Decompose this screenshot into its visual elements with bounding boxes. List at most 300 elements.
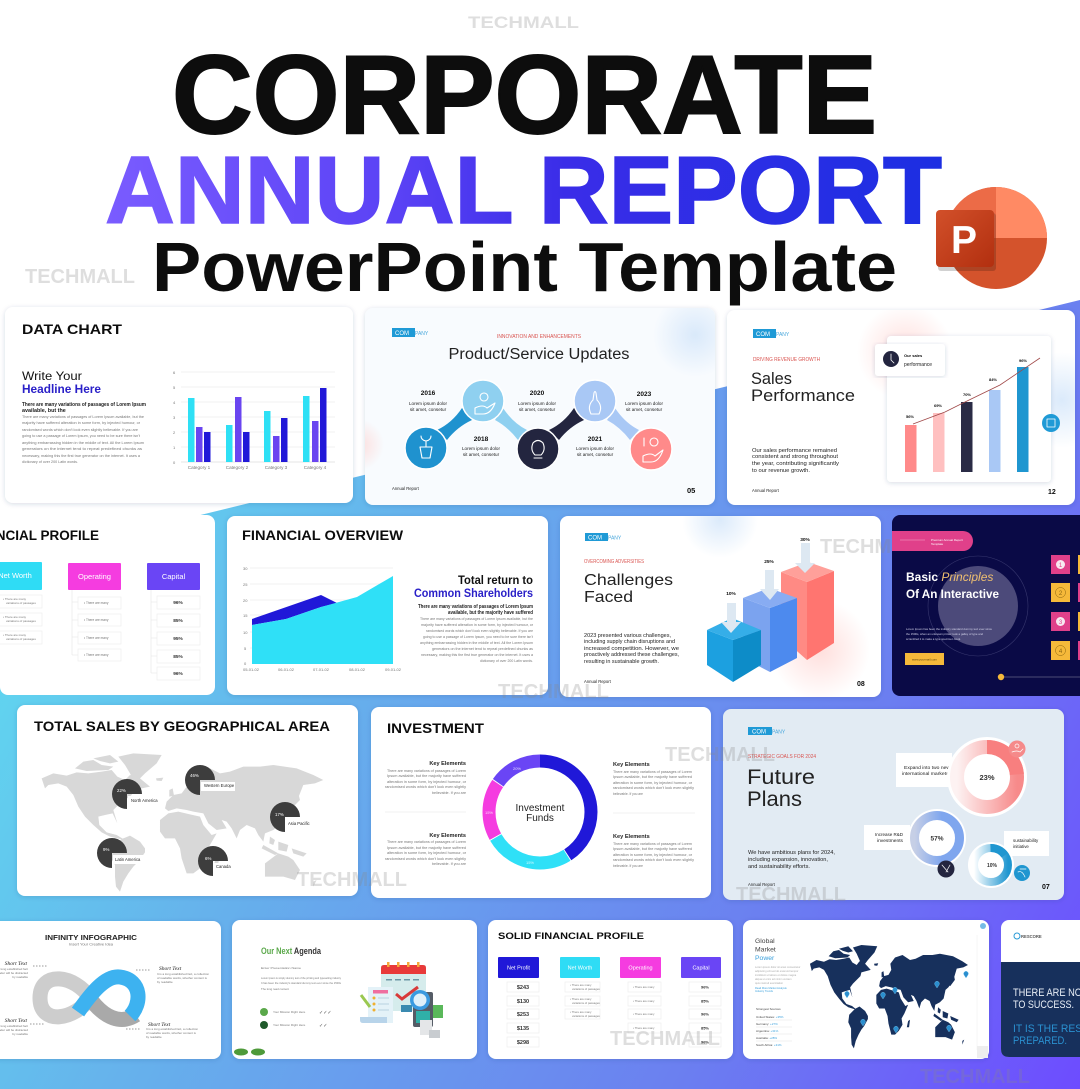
agenda items: ✓✓✓ — [319, 1010, 332, 1016]
text block: future summary: and sustainability efforts. — [748, 864, 810, 870]
heading: basic principles: Of An Interactive — [906, 587, 999, 601]
bar values: 70% — [963, 392, 971, 397]
area chart: 07-01-02 — [313, 667, 330, 672]
logo: company: COM — [756, 332, 770, 338]
timeline labels: sit amet, consetur — [463, 452, 500, 457]
text block: sales summary: to our revenue growth. — [752, 468, 810, 474]
map pins — [845, 971, 968, 1033]
text block: key elements left: There are many variations of passages of Lorem — [387, 839, 467, 844]
text block — [755, 965, 801, 993]
panel: investment — [371, 707, 711, 898]
donut: 23 percent: 23% — [979, 773, 995, 782]
footer: Annual Report — [584, 679, 612, 684]
text block: key elements right — [613, 762, 695, 868]
operating rows — [628, 982, 661, 1033]
text block: key elements right: alteration in some form, by injected humour, or — [613, 780, 693, 785]
labels: short text: Short Text — [148, 1022, 171, 1028]
operating rows: • There are many — [84, 618, 109, 622]
text block: total return: There are many variations of passages of Lorem Ipsum available, but the — [420, 616, 534, 621]
footer — [584, 679, 865, 688]
footer: 05 — [687, 486, 695, 495]
net profit rows: $298 — [517, 1040, 529, 1046]
text block: the 1500s, when an unknown printer took a galley of type and — [906, 632, 983, 636]
text block: key elements right: There are many variations of passages of Lorem — [613, 769, 693, 774]
icon: powerpoint logo — [936, 187, 1047, 289]
area chart: 05-01-02 — [243, 667, 260, 672]
text block: total return: going to use a passage of Lorem Ipsum, you need to be sure there isn't — [423, 634, 534, 639]
text block: total return: majority have suffered alteration in some form, by injected humour, or — [421, 622, 534, 627]
net worth rows — [0, 595, 42, 644]
bar values: 56% — [906, 414, 914, 419]
text block: challenges summary: resulting in sustainable growth. — [584, 659, 659, 665]
icon: powerpoint logo: P — [951, 219, 977, 262]
panel: rescore slide (cropped) — [1001, 920, 1080, 1057]
labels: short text: It is a long established fact, a collection — [157, 972, 209, 976]
text block — [906, 627, 992, 641]
3d bar chart: 30% — [800, 537, 811, 543]
text block — [261, 966, 341, 991]
pill header: Template — [931, 542, 944, 546]
text block: total return: Common Shareholders — [414, 588, 533, 600]
footer: 08 — [857, 681, 865, 688]
panel: global market power — [743, 920, 989, 1059]
donut: 23 percent — [947, 737, 1027, 817]
logo: company: PANY — [772, 730, 786, 736]
bar chart: categories: 3 — [173, 415, 176, 420]
timeline labels — [409, 390, 663, 457]
bar chart: categories: Category 3 — [265, 465, 288, 470]
capital rows: 96% — [173, 600, 184, 606]
column headers: Capital — [692, 966, 710, 972]
logo: rescore: RESCORE — [1021, 934, 1042, 939]
panel: financial profile (cropped) — [0, 515, 215, 695]
logo: company: PANY — [608, 536, 622, 542]
list: countries: Argentina: +31% — [756, 1029, 779, 1033]
net worth rows: variations of passages — [572, 987, 600, 991]
heading: Our Next Agenda — [261, 946, 322, 956]
card: our sales performance: Our sales — [904, 353, 923, 358]
pie labels: Western Europe — [204, 783, 235, 788]
heading: future plans — [747, 754, 816, 811]
bars — [905, 367, 1028, 472]
text block: Read More Market Analysis — [755, 986, 787, 990]
area chart: 0 — [244, 661, 247, 666]
capital rows: 85% — [701, 1026, 709, 1030]
panel: data chart — [5, 307, 353, 503]
text block: challenges summary — [584, 633, 679, 665]
capital rows — [151, 590, 200, 680]
pie labels: 46% — [190, 773, 199, 778]
labels: short text: by readable — [12, 975, 28, 979]
timeline labels: sit amet, consetur — [577, 452, 614, 457]
world map dark — [810, 945, 968, 1048]
text block: Lorem Ipsum has been the industry standard dummy text ever since — [906, 627, 992, 631]
timeline connectors — [437, 408, 639, 440]
text block: challenges summary: including supply chain disruptions and — [584, 639, 675, 645]
logo: company: COM — [588, 536, 602, 542]
logo: company: COM — [752, 730, 766, 736]
labels: short text: of readable words, whether content is — [146, 1031, 196, 1035]
heading: product service updates: INNOVATION AND ENHANCEMENTS — [497, 334, 581, 340]
heading: future plans: Plans — [747, 788, 802, 811]
numbered squares: 1 — [1059, 563, 1063, 569]
text block: total return — [414, 575, 534, 663]
column headers — [498, 957, 721, 978]
logo: company: PANY — [776, 332, 790, 338]
panel: solid financial profile — [488, 920, 733, 1059]
text block: key elements left: There are many variations of passages of Lorem — [387, 768, 467, 773]
timeline labels: 2018 — [474, 436, 489, 443]
text block: total return: Total return to — [458, 575, 533, 587]
agenda items: Your Mission Right Here — [273, 1010, 306, 1014]
text block: key elements left: Ipsum available, but the majority have suffered — [387, 773, 466, 778]
capital rows: 96% — [701, 1012, 709, 1016]
label box: markets: Expand into two new — [904, 765, 951, 770]
net worth rows: variations of passages — [6, 619, 36, 623]
net profit rows: $243 — [517, 985, 529, 991]
text block: key elements left — [385, 761, 467, 866]
net worth rows: • There are many — [570, 1010, 592, 1014]
bar values: 84% — [989, 377, 997, 382]
footer: Annual Report — [392, 486, 420, 491]
timeline labels: sit amet, consetur — [626, 407, 663, 412]
timeline labels: sit amet, consetur — [519, 407, 556, 412]
panel: challenges faced — [559, 516, 882, 699]
card: our sales performance: performance — [904, 362, 932, 368]
donut: 10 percent — [968, 842, 1030, 888]
text block: total return: generators on the internet tend to repeat predefined chunks as — [432, 646, 533, 651]
text block: aliqua ut enim ad minim veniam — [755, 977, 791, 981]
heading: TOTAL SALES BY GEOGRAPHICAL AREA — [34, 719, 330, 734]
gradient background — [0, 300, 1080, 1089]
bar chart: categories: Category 2 — [226, 465, 249, 470]
logo: company — [392, 328, 429, 337]
pie labels: Latin America — [115, 857, 141, 862]
title: powerpoint template: PowerPoint Template — [152, 228, 897, 306]
donut labels: 15% — [485, 810, 493, 815]
footer: 07 — [1042, 884, 1050, 891]
bar chart: categories: 6 — [173, 370, 176, 375]
capital rows: 85% — [173, 618, 184, 624]
text block: there are no — [1013, 987, 1080, 1047]
text block: write your headline: going to use a passage of Lorem Ipsum, you need to be sure there isn't — [22, 433, 141, 438]
operating rows: • There are many — [84, 601, 109, 605]
text block: The long read content — [261, 987, 289, 991]
donut labels: Funds — [526, 813, 554, 824]
list: countries — [756, 1007, 792, 1047]
text block: key elements left: randomised words which don't look even slightly — [385, 784, 466, 789]
timeline icons — [420, 392, 663, 462]
text block: key elements right: Key Elements — [613, 834, 650, 840]
label box: research — [864, 825, 910, 850]
chart card — [887, 336, 1051, 482]
text block: key elements right: believable. If you are — [613, 863, 644, 868]
labels: short text: of readable words, whether content is — [157, 976, 207, 980]
column headers: Capital — [162, 572, 186, 581]
text block: write your headline: available, but the — [22, 408, 66, 414]
pie labels: North America — [131, 798, 158, 803]
operating rows: • There are many — [84, 636, 109, 640]
operating rows: • There are many — [84, 653, 109, 657]
watermarks over slides: TECHMALL — [297, 869, 407, 891]
text block: incididunt ut labore et dolore magna — [755, 973, 797, 977]
text block: Industry Trends — [755, 989, 774, 993]
text block: future summary — [748, 850, 835, 870]
heading: product service updates: Product/Service Updates — [448, 346, 630, 363]
infinity diagram — [40, 977, 138, 1019]
heading: sales performance — [751, 357, 855, 405]
numbered squares: 2 — [1059, 591, 1063, 597]
donut labels: 40% — [573, 802, 581, 807]
column headers: Operating — [78, 572, 111, 581]
operating rows — [72, 590, 121, 661]
panel: total sales by geographical area — [17, 705, 358, 896]
bar chart: categories: 5 — [173, 385, 176, 390]
text block: total return: available, but the majority have suffered — [448, 610, 533, 616]
column headers: Net Profit — [507, 966, 530, 972]
operating rows: • There are many — [633, 999, 655, 1003]
labels: short text — [0, 961, 209, 1039]
labels: short text: by readable — [12, 1032, 28, 1036]
text block: key elements right: alteration in some form, by injected humour, or — [613, 852, 693, 857]
capital rows: 85% — [701, 998, 709, 1004]
panel: product service updates — [363, 307, 717, 507]
text block: total return: dictionary of over 200 Latin words. — [480, 658, 533, 663]
illustration: calendar and finance — [360, 962, 443, 1038]
logo: company: COM — [395, 331, 409, 337]
capital rows: 95% — [173, 636, 184, 642]
agenda items: ✓✓ — [319, 1023, 327, 1029]
panel: sales performance — [727, 304, 1080, 505]
text block: total return: necessary, making this the first true generator on the internet. It uses a — [421, 652, 534, 657]
watermarks over slides — [297, 744, 1030, 1088]
footer — [748, 882, 1050, 891]
text block: total return: anything embarrassing hidden in the middle of text. All the Lorem Ipsum — [420, 640, 534, 645]
decorative circle — [928, 556, 1028, 656]
footer: Annual Report — [752, 488, 780, 493]
list: countries: Australia: +28% — [756, 1036, 777, 1040]
panel: infinity infographic — [0, 921, 221, 1059]
text block: key elements left: Ipsum available, but the majority have suffered — [387, 845, 466, 850]
text block: challenges summary: increased competition. However, we — [584, 646, 679, 652]
pie labels: 6% — [205, 856, 211, 861]
labels: short text: by readable — [157, 980, 173, 984]
text block: write your headline: necessary, making this the first true generator on the internet. It uses a — [22, 453, 141, 458]
donut chart — [489, 761, 591, 863]
list: countries: Germany: +27% — [756, 1022, 778, 1026]
bar chart: categories: 1 — [173, 445, 176, 450]
text block: key elements right: Ipsum available, but the majority have suffered — [613, 774, 692, 779]
numbered squares — [1051, 555, 1080, 660]
world map — [42, 753, 323, 892]
agenda items — [260, 1008, 332, 1029]
timeline labels: Lorem ipsum dolor — [518, 401, 556, 406]
text block: key elements left: believable. If you are — [432, 790, 467, 795]
list: countries: United States: +35% — [756, 1015, 784, 1019]
pie labels: 9% — [103, 847, 109, 852]
operating rows: • There are many — [633, 1026, 655, 1030]
text block: key elements right: There are many variations of passages of Lorem — [613, 841, 693, 846]
area chart: 06-01-02 — [278, 667, 295, 672]
text block: total return: randomised words which don't look even slightly believable. If you are — [426, 628, 534, 633]
text block: write your headline: dictionary of over 200 Latin words. — [22, 459, 78, 464]
net worth rows: variations of passages — [572, 1001, 600, 1005]
heading: challenges faced: Faced — [584, 589, 633, 606]
corner details — [977, 923, 988, 1058]
text block: total return: There are many variations of passages of Lorem Ipsum — [418, 604, 533, 610]
text block: sales summary: Our sales performance remained — [752, 448, 837, 454]
heading: challenges faced: Challenges — [584, 572, 673, 589]
text block: key elements right: believable. If you are — [613, 791, 644, 796]
heading: INVESTMENT — [387, 720, 484, 736]
panel: our next agenda — [232, 920, 477, 1059]
text block: key elements right: randomised words which don't look even slightly — [613, 857, 694, 862]
pill header: Premium Annual Report — [931, 538, 963, 542]
3d bar chart: 25% — [764, 559, 775, 565]
labels: short text: It is a long established fact, a collection — [146, 1027, 198, 1031]
heading: Market — [755, 946, 776, 954]
title: annual report: ANNUAL REPORT — [105, 137, 942, 244]
footer: 12 — [1048, 489, 1056, 496]
bar chart: categories: 4 — [173, 400, 176, 405]
watermarks over slides: TECHMALL — [665, 744, 775, 766]
timeline labels: 2021 — [588, 436, 603, 443]
footer: Annual Report — [748, 882, 776, 887]
text block: write your headline: anything embarrassing hidden in the middle of text. All the Lorem Ipsum — [22, 440, 145, 445]
timeline labels: 2020 — [530, 390, 545, 397]
pie markers — [97, 765, 300, 876]
button: www.yourmail.com — [912, 658, 937, 662]
icon: document badge — [1042, 414, 1060, 432]
bar values: 69% — [934, 403, 942, 408]
area chart: 10 — [243, 630, 248, 635]
text block: key elements left: alteration in some form, by injected humour, or — [387, 779, 467, 784]
column headers — [0, 562, 200, 590]
text block: future summary: including expansion, innovation, — [748, 857, 828, 863]
net profit rows: $130 — [517, 999, 529, 1005]
heading: basic principles — [906, 570, 999, 601]
donut: 57 percent: 57% — [930, 836, 944, 842]
net worth rows: variations of passages — [6, 601, 36, 605]
watermarks behind slides: TECHMALL — [25, 266, 135, 288]
text block: key elements left: randomised words which don't look even slightly — [385, 856, 466, 861]
text block: key elements right: Ipsum available, but the majority have suffered — [613, 846, 692, 851]
net worth rows: • There are many — [570, 997, 592, 1001]
footer — [392, 486, 695, 495]
list: countries: Strongest Sources — [756, 1007, 781, 1011]
heading: future plans: Future — [747, 766, 815, 789]
watermarks behind slides — [25, 13, 579, 288]
text block: challenges summary: 2023 presented various challenges, — [584, 633, 671, 639]
logo: company — [753, 329, 790, 338]
heading: sales performance: Performance — [751, 387, 855, 405]
donut labels: Investment — [516, 803, 565, 814]
pie labels — [103, 773, 310, 872]
area chart: 08-01-02 — [349, 667, 366, 672]
watermarks behind slides: TECHMALL — [468, 13, 579, 32]
text block: key elements left: Key Elements — [429, 833, 466, 839]
column headers: Operating — [628, 966, 653, 972]
panel: basic principles dark — [892, 515, 1080, 696]
footer — [752, 488, 1056, 496]
timeline labels: 2023 — [637, 391, 652, 398]
capital rows: 96% — [173, 671, 184, 677]
text block: there are no: PREPARED. — [1013, 1035, 1067, 1047]
text block: Enter Presentation Name — [261, 966, 301, 970]
capital rows: 96% — [701, 1040, 709, 1044]
heading: sales performance: DRIVING REVENUE GROWTH — [753, 357, 820, 363]
heading — [755, 938, 776, 962]
label box: sustainability — [1004, 831, 1049, 856]
net worth rows: • There are many — [3, 615, 27, 619]
panel: financial overview — [227, 516, 548, 695]
area chart: 09-01-02 — [385, 667, 402, 672]
heading: financial overview: FINANCIAL OVERVIEW — [242, 528, 403, 543]
bar chart: categories: Category 1 — [188, 465, 211, 470]
text block: key elements right: randomised words which don't look even slightly — [613, 785, 694, 790]
capital rows — [689, 982, 721, 1047]
text block: key elements right: Key Elements — [613, 762, 650, 768]
watermarks over slides: TECHMALL — [736, 884, 846, 906]
operating rows: • There are many — [633, 1012, 655, 1016]
capital rows: 96% — [701, 984, 709, 990]
net worth rows — [565, 982, 600, 1019]
area chart: 20 — [243, 598, 248, 603]
heading: future plans: STRATEGIC GOALS FOR 2024 — [748, 754, 816, 760]
heading: Insert Your Creative Idea — [69, 942, 114, 946]
logo: company — [748, 727, 786, 736]
3d bar chart — [707, 537, 834, 682]
pie labels: 22% — [117, 788, 126, 793]
text block: key elements left: Key Elements — [429, 761, 466, 767]
text block: future summary: We have ambitious plans for 2024, — [748, 850, 835, 856]
pie labels: Asia Pacific — [288, 821, 310, 826]
pie labels: 17% — [275, 812, 284, 817]
title: corporate: CORPORATE — [172, 33, 877, 157]
card: our sales performance — [875, 344, 945, 376]
numbered squares: 3 — [1059, 620, 1063, 626]
area chart: 5 — [244, 646, 247, 651]
area chart: 15 — [243, 613, 248, 618]
heading: product service updates — [448, 334, 630, 363]
area chart: 30 — [243, 566, 248, 571]
label box: sustainability: initiative — [1013, 844, 1029, 849]
labels: short text: Short Text — [5, 961, 27, 967]
net profit rows: $253 — [517, 1012, 529, 1018]
panel: future plans — [723, 709, 1064, 900]
text block: Lorem ipsum dolor sit amet consectetur — [755, 965, 801, 969]
timeline labels: Lorem ipsum dolor — [625, 401, 663, 406]
3d bar chart: 10% — [726, 591, 737, 597]
text block: adipiscing elit sed do eiusmod tempor — [755, 969, 799, 973]
net worth rows: • There are many — [3, 597, 27, 601]
label box: markets — [896, 753, 952, 787]
trend line — [913, 358, 1040, 424]
text block: write your headline: Write Your — [22, 371, 82, 383]
text block: write your headline: There are many variations of passages of Lorem Ipsum available, but the — [22, 414, 145, 419]
donut: 57 percent — [908, 809, 966, 878]
heading: basic principles: Basic Principles — [906, 570, 993, 584]
timeline labels: sit amet, consetur — [410, 407, 447, 412]
labels: short text: by readable — [146, 1035, 162, 1039]
text block: Lorem Ipsum is simply dummy text of the printing and typesetting industry — [261, 976, 341, 980]
text block: write your headline — [22, 371, 146, 464]
donut labels: 20% — [513, 766, 521, 771]
labels: short text: Short Text — [159, 966, 182, 972]
net worth rows: variations of passages — [572, 1014, 600, 1018]
operating rows: • There are many — [633, 985, 655, 989]
timeline labels: Lorem ipsum dolor — [409, 401, 447, 406]
